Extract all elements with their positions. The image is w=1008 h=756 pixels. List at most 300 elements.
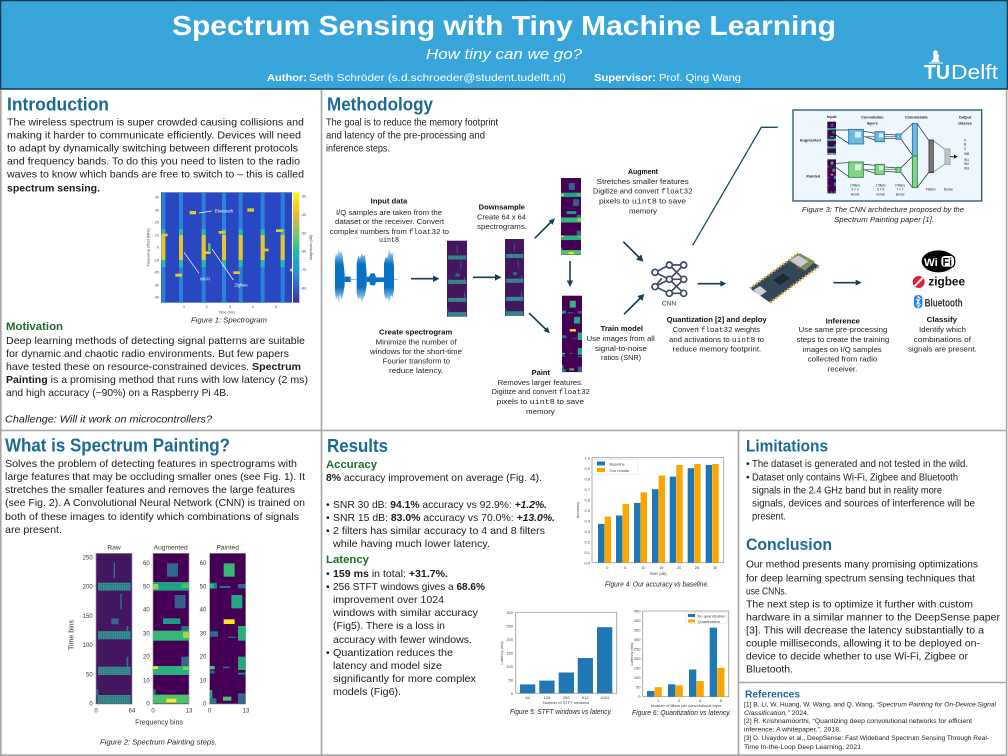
step: inference text: images on I/Q samples	[803, 345, 882, 354]
chart: figure 5 STFT windows vs latency: 50	[509, 678, 514, 682]
figure 2: spectrum painting steps: 60	[143, 561, 150, 567]
chart: figure 4 accuracy vs baseline: 0.0	[584, 560, 591, 566]
chart: figure 5 STFT windows vs latency: 0	[511, 691, 514, 696]
figure 3: CNN architecture	[793, 110, 982, 201]
chart: figure 6 quantization vs latency: 50	[636, 684, 641, 690]
panel: methodology	[326, 94, 982, 416]
accuracy text: while having much lower latency.	[332, 538, 490, 550]
latency text: latency and model size	[333, 660, 442, 672]
step: train model text: Use images from all	[587, 334, 655, 343]
conclusion text: use CNNs.	[746, 586, 787, 598]
heading: motivation: Motivation	[6, 321, 63, 333]
figure 3: CNN architecture: 2 filters	[876, 184, 886, 188]
caption: figure 3: Figure 3: The CNN architecture proposed by the	[802, 205, 964, 214]
caption: figure 6: Figure 6: Quantization vs latency.	[632, 708, 731, 717]
figure 3: CNN architecture: W1	[964, 158, 969, 162]
figure 3: CNN architecture: V	[964, 139, 967, 143]
figure 2: spectrum painting steps	[68, 544, 250, 726]
chart: figure 4 accuracy vs baseline	[575, 456, 724, 576]
author line: Author:	[267, 72, 307, 84]
figure 3: CNN architecture: 2 filters	[895, 184, 905, 188]
figure 3: CNN architecture: B	[964, 142, 967, 146]
heading: results: Results	[327, 436, 388, 456]
logo: TU Delft: TU	[924, 62, 950, 84]
limitations text: •	[746, 472, 750, 484]
figure 3: CNN architecture: Flatten	[926, 188, 936, 192]
arrow: downsample to paint	[529, 313, 550, 333]
chart: figure 5 STFT windows vs latency: 1024	[600, 695, 610, 700]
logo: TU Delft	[924, 50, 999, 84]
axis labels: -30	[301, 195, 306, 199]
reference list: [3] D. Uvaydov et al., DeepSense: Fast Wideband Spectrum Sensing Through Real-	[744, 735, 989, 742]
chart: figure 6 quantization vs latency: 100	[634, 675, 641, 680]
chart: figure 6 quantization vs latency: 4	[699, 698, 702, 703]
header banner	[0, 0, 1008, 89]
axis labels: 5	[275, 305, 277, 309]
figure 2: spectrum painting steps: 0	[151, 709, 155, 715]
chart: figure 6 quantization vs latency: 8	[720, 698, 723, 703]
heading: introduction: Introduction	[7, 94, 109, 114]
figure 2: spectrum painting steps: 0	[146, 702, 150, 708]
chart: figure 6 quantization vs latency: 2	[678, 698, 681, 703]
axis labels: 2	[206, 305, 208, 309]
accuracy text: •	[326, 525, 330, 537]
step: paint text: Removes larger features.	[498, 378, 583, 387]
intro text: and frequency bands. To do this you need to listen to the radio	[7, 156, 300, 168]
heading: limitations: Limitations	[746, 436, 828, 456]
arrow: augment to paint	[567, 261, 573, 287]
axis labels: 10	[155, 233, 159, 237]
image: augmented spectrogram	[561, 178, 581, 255]
chart: figure 4 accuracy vs baseline: 1.0	[584, 456, 591, 460]
chart: figure 5 STFT windows vs latency: 512	[582, 695, 589, 700]
step: train model text: ratios (SNR)	[601, 353, 641, 362]
caption: figure 4: Figure 4: Our accuracy vs baseline.	[605, 580, 709, 588]
legend: Our results	[610, 468, 629, 473]
chart: figure 4 accuracy vs baseline: 0.4	[584, 518, 591, 524]
step: quantization text: and activations to uint8 to	[669, 335, 764, 345]
step: input data text	[330, 196, 449, 245]
arrow: downsample to augment	[535, 218, 555, 238]
conclusion text	[746, 558, 1001, 676]
step: inference text	[797, 316, 889, 373]
figure 3: CNN architecture: Augmented	[800, 138, 822, 142]
reference list	[744, 702, 997, 751]
panel: results	[326, 436, 731, 717]
reference list: [2] R. Krishnamoorthi, “Quantizing deep convolutional networks for efficient	[744, 718, 972, 725]
step: train model text: signal-to-noise	[595, 344, 647, 353]
figure 3: CNN architecture: 3 × 3	[851, 188, 859, 192]
step: downsample text	[477, 202, 527, 231]
goal text: inference steps.	[326, 142, 390, 154]
title: Spectrum Sensing with Tiny Machine Learning	[172, 10, 836, 41]
accuracy text: •	[326, 512, 330, 524]
figure 2: spectrum painting steps: 10	[143, 678, 150, 684]
chart: figure 5 STFT windows vs latency: 300	[506, 610, 514, 615]
figure 2: spectrum painting steps: 0	[203, 702, 207, 708]
author line	[267, 72, 741, 84]
step: augment text: Digitize and convert float32	[593, 186, 693, 196]
step: classify text: combinations of	[914, 335, 971, 344]
latency text: accuracy with fewer windows.	[333, 634, 472, 646]
logo: zigbee: zigbee	[928, 275, 965, 289]
heading: accuracy: Accuracy	[326, 459, 378, 471]
chart: figure 5 STFT windows vs latency: Number of STFT windows	[543, 700, 589, 705]
step: downsample text: spectrograms.	[477, 222, 527, 231]
figure 3: CNN architecture: layers	[867, 122, 878, 126]
step: augment text: Augment	[628, 167, 659, 176]
panel: limitations	[746, 436, 975, 522]
figure 2: spectrum painting steps: Time bins	[68, 619, 75, 650]
latency text: •	[326, 568, 330, 580]
conclusion text: The next step is to optimize it further with custom	[746, 598, 973, 610]
logo: zigbee	[913, 275, 965, 289]
axis labels: -40	[301, 213, 306, 217]
latency text: 159 ms in total: +31.7%.	[333, 568, 448, 580]
figure 3: CNN architecture: 7 × 7	[896, 188, 904, 192]
chart: figure 5 STFT windows vs latency: 64	[525, 695, 531, 700]
step: train model text: Train model	[601, 324, 643, 333]
step: classify text	[908, 315, 977, 353]
axis labels: -70	[301, 268, 306, 272]
annotations: Wi-Fi	[200, 277, 210, 282]
chart: figure 6 quantization vs latency: 150	[634, 666, 641, 670]
logo: Wi-Fi: Fi	[943, 257, 952, 269]
heading: what is spectrum painting: What is Spectrum Painting?	[5, 436, 230, 456]
intro text: to adapt by dynamically switching between different protocols	[7, 142, 298, 154]
chart: figure 6 quantization vs latency: 400	[634, 618, 641, 623]
step: inference text: receiver.	[828, 364, 857, 373]
panel: introduction	[5, 94, 313, 426]
icon: waveform	[335, 247, 397, 304]
caption: figure 2: Figure 2: Spectrum Painting steps.	[100, 738, 217, 746]
description text: are present.	[5, 524, 62, 536]
motivation text: and high accuracy (~90%) on a Raspberry Pi 4B.	[6, 387, 229, 399]
axis labels: 40	[155, 196, 159, 200]
intro text: spectrum sensing.	[7, 182, 100, 194]
figure 3: CNN architecture: Concatenate	[905, 116, 928, 120]
axis labels: -10	[154, 258, 159, 262]
figure 2: spectrum painting steps: 10	[200, 678, 207, 684]
reference list: inference: A whitepaper.”, 2018.	[744, 726, 841, 734]
step: create spectrogram text: windows for the short-time	[369, 347, 462, 356]
axis labels: -50	[301, 231, 306, 235]
figure 2: spectrum painting steps: 200	[83, 585, 93, 591]
figure 3: CNN architecture: W2	[964, 162, 969, 166]
figure 2: spectrum painting steps: 30	[200, 631, 207, 637]
figure 3: CNN architecture: kernel	[876, 193, 885, 197]
chart: figure 4 accuracy vs baseline: 0.6	[584, 498, 591, 502]
step: paint text	[492, 368, 590, 416]
chart: figure 6 quantization vs latency: Number of filters per convolutional layer	[651, 703, 722, 708]
legend	[594, 460, 638, 474]
figure 2: spectrum painting steps: 64	[129, 709, 136, 715]
chart: figure 4 accuracy vs baseline: 0	[606, 565, 609, 570]
axis labels: 30	[155, 208, 159, 212]
figure 3: CNN architecture: kernel	[851, 193, 860, 197]
figure 2: spectrum painting steps: 13	[243, 709, 250, 715]
step: classify text: signals are present.	[908, 344, 977, 353]
latency text: •	[326, 581, 330, 593]
chart: figure 6 quantization vs latency: 250	[634, 646, 641, 652]
accuracy text	[326, 472, 555, 550]
logo: TU Delft: Delft	[951, 62, 999, 84]
figure 3: CNN architecture: Output	[959, 116, 972, 120]
axis labels: -20	[154, 271, 159, 275]
heading: methodology: Methodology	[327, 94, 433, 114]
latency text: (Fig5). There is a loss in	[333, 620, 445, 632]
arrow: waveform to spectrogram	[411, 276, 440, 282]
author line: Supervisor:	[594, 72, 656, 84]
conclusion text: Our method presents many promising optimizations	[746, 558, 978, 570]
figure 2: spectrum painting steps: 40	[143, 608, 150, 614]
figure 2: spectrum painting steps: 13	[186, 709, 193, 715]
axis labels: Frequency offset (MHz)	[147, 228, 151, 266]
step: classify text: Classify	[927, 315, 957, 324]
legend: Baseline	[610, 462, 626, 466]
limitations text: •	[746, 458, 750, 470]
figure 2: spectrum painting steps: 100	[83, 643, 93, 649]
axis labels: 3	[229, 305, 231, 309]
chart: figure 4 accuracy vs baseline: 25	[695, 565, 700, 570]
conclusion text: Bluetooth.	[746, 664, 793, 676]
chart: figure 4 accuracy vs baseline: 0.3	[584, 529, 591, 534]
goal text: and latency of the pre-processing and	[326, 130, 485, 142]
latency text: •	[326, 647, 330, 659]
caption: figure 1: Figure 1: Spectrogram	[191, 316, 267, 324]
accuracy text: 2 filters has similar accuracy to 4 and 8 filters	[333, 525, 545, 537]
figure 2: spectrum painting steps: 0	[94, 709, 98, 715]
figure 3: CNN architecture: Input	[827, 115, 837, 119]
axis labels: 4	[252, 305, 254, 309]
chart: figure 6 quantization vs latency: 0	[638, 694, 641, 699]
axis labels: Time (ms)	[219, 310, 235, 314]
step: inference text: steps to create the training	[797, 335, 889, 344]
latency text: improvement over 1024	[333, 594, 444, 606]
chart: figure 5 STFT windows vs latency	[499, 610, 617, 705]
chart: figure 4 accuracy vs baseline: SNR (dB)	[649, 571, 667, 576]
caption: figure 3	[802, 205, 964, 224]
latency text: Quantization reduces the	[333, 647, 453, 659]
axis labels: -80	[301, 286, 306, 290]
legend	[686, 612, 727, 624]
latency text: models (Fig6).	[333, 686, 401, 698]
step: paint text: Digitize and convert float32	[492, 387, 590, 397]
limitations text	[746, 458, 975, 522]
annotations	[184, 209, 248, 287]
description text: stretches the smaller features and removes the large features	[5, 484, 295, 496]
figure 2: spectrum painting steps: 60	[200, 561, 207, 567]
motivation text	[6, 335, 308, 399]
figure 3: CNN architecture: Z	[964, 147, 966, 151]
image: spectrogram	[447, 241, 467, 317]
step: create spectrogram text: Create spectrogram	[379, 328, 452, 336]
motivation text: Painting is a promising method that runs with low latency (2 ms)	[6, 374, 308, 386]
motivation text: have tested these on resource-constrained devices. Spectrum	[6, 361, 301, 373]
figure 2: spectrum painting steps: 250	[83, 556, 93, 562]
axis labels: 1	[183, 305, 185, 309]
accuracy text: SNR 30 dB: 94.1% accuracy vs 92.9%: +1.2%.	[333, 499, 547, 511]
conclusion text: device to decide whether to use Wi-Fi, Zigbee or	[746, 650, 968, 662]
accuracy text: •	[326, 499, 330, 511]
heading: latency: Latency	[326, 554, 370, 566]
logo: Bluetooth	[914, 295, 963, 309]
step: paint text: pixels to uint8 to save	[497, 397, 584, 407]
step: augment text: memory	[629, 206, 657, 215]
step: input data text: Input data	[371, 196, 408, 206]
step: input data text: I/Q samples are taken from the	[336, 208, 442, 217]
step: downsample text: Downsample	[479, 202, 525, 212]
limitations text: signals in the 2.4 GHz band but in reality more	[752, 484, 942, 496]
step: create spectrogram text: Minimize the number of	[376, 338, 457, 346]
chart: figure 5 STFT windows vs latency: 200	[506, 637, 514, 642]
logo: Bluetooth: Bluetooth	[925, 297, 963, 309]
lower right diagram	[623, 242, 965, 314]
chart: figure 5 STFT windows vs latency: 128	[544, 695, 551, 700]
figure 3: CNN architecture: WB	[964, 152, 970, 156]
step: inference text: Inference	[826, 316, 860, 325]
latency text: significantly for more complex	[333, 673, 477, 685]
heading: conclusion: Conclusion	[746, 535, 832, 554]
panel: what is spectrum painting	[5, 436, 305, 746]
chart: figure 6 quantization vs latency: 1	[657, 698, 660, 703]
logo: Wi-Fi	[922, 250, 955, 272]
conclusion text: couple milliseconds, allowing it to be deployed on-	[746, 638, 981, 650]
accuracy text: SNR 15 dB: 83.0% accuracy vs 70.0%: +13.0%.	[333, 512, 555, 524]
axis labels: 20	[155, 221, 159, 225]
step: train model text	[587, 324, 655, 362]
figure 2: spectrum painting steps: 40	[200, 608, 207, 614]
arrow: CNN to board	[698, 281, 726, 287]
step: create spectrogram text: Fourier transform to	[383, 356, 450, 366]
chart: figure 4 accuracy vs baseline: 10	[641, 565, 646, 570]
chart: figure 4 accuracy vs baseline: 15	[659, 565, 664, 570]
axis labels: Magnitude (dB)	[309, 235, 313, 260]
figure 2: spectrum painting steps: 50	[143, 584, 150, 590]
subtitle: How tiny can we go?	[426, 46, 583, 63]
chart: figure 6 quantization vs latency: 450	[634, 608, 641, 614]
description text: large features that may be occluding smaller ones (see Fig. 1). It	[5, 471, 305, 483]
intro text	[6, 116, 304, 194]
step: input data text: complex numbers from float32 to	[330, 227, 449, 237]
chart: figure 4 accuracy vs baseline: 0.7	[584, 487, 591, 492]
figure 2: spectrum painting steps: Painted	[216, 544, 239, 551]
latency text: windows with similar accuracy	[332, 607, 479, 619]
step: paint text: memory	[526, 407, 555, 416]
chart: figure 4 accuracy vs baseline: 0.2	[584, 540, 591, 544]
figure 2: spectrum painting steps: 20	[143, 655, 150, 661]
reference list: Classification,” 2024.	[744, 710, 809, 717]
latency text	[326, 568, 486, 698]
heading: references: References	[745, 690, 800, 700]
figure 2: spectrum painting steps: 50	[86, 672, 93, 678]
chart: figure 6 quantization vs latency: Latency (ms)	[629, 642, 634, 666]
panel: references	[744, 690, 997, 751]
step: downsample text: Create 64 x 64	[477, 212, 526, 222]
connector line: CNN to figure 3	[693, 127, 778, 245]
step: augment text	[593, 167, 693, 215]
figure 3: CNN architecture: Dense	[944, 188, 953, 192]
chart: figure 5 STFT windows vs latency: Latency (ms)	[499, 641, 504, 665]
author line: Seth Schröder (s.d.schroeder@student.tudelft.nl)	[309, 72, 566, 84]
step: quantization text: reduce memory footprint.	[673, 344, 761, 353]
chart: figure 6 quantization vs latency: 300	[634, 637, 641, 642]
description text: Solves the problem of detecting features in spectrograms with	[5, 458, 297, 470]
step: inference text: collected from radio	[808, 354, 877, 363]
motivation text: for dynamic and chaotic radio environments. But few papers	[6, 348, 289, 360]
chart: figure 5 STFT windows vs latency: 250	[506, 624, 514, 628]
chart: figure 4 accuracy vs baseline: 0.9	[584, 466, 591, 471]
chart: figure 4 accuracy vs baseline: 0.1	[584, 550, 591, 555]
annotations: Zigbee	[234, 282, 248, 287]
label: CNN: CNN	[662, 301, 676, 308]
step: create spectrogram text: reduce latency.	[389, 366, 443, 375]
figure 3: CNN architecture: W3	[964, 166, 969, 170]
step: inference text: Use same pre-processing	[799, 325, 887, 334]
axis labels: -60	[301, 250, 306, 254]
description text	[5, 458, 305, 536]
figure 2: spectrum painting steps: 150	[83, 614, 93, 620]
bars: our results	[605, 464, 719, 563]
challenge question: Challenge: Will it work on microcontrollers?	[5, 414, 212, 426]
step: augment text: Stretches smaller features	[597, 177, 689, 186]
reference list: Time In-the-Loop Deep Learning, 2021	[744, 744, 861, 751]
limitations text: Dataset only contains Wi-Fi, Zigbee and Bluetooth	[752, 472, 958, 484]
figure 2: spectrum painting steps: 0	[89, 701, 93, 707]
chart: figure 4 accuracy vs baseline: 30	[713, 565, 718, 570]
step: create spectrogram text	[369, 328, 462, 375]
figure 2: spectrum painting steps: 50	[200, 584, 207, 590]
arrow: spectrogram to downsample	[473, 274, 502, 281]
figure 3: CNN architecture: kernel	[896, 193, 905, 197]
axis labels	[147, 195, 313, 314]
step: input data text: uint8	[379, 237, 399, 245]
conclusion text: for deep learning spectrum sensing techniques that	[746, 572, 975, 584]
chart: figure 6 quantization vs latency: 350	[634, 628, 641, 632]
reference list: [1] B. Li, W. Huang, W. Wang, and Q. Wang, “Spectrum Painting for On-Device Signal	[744, 702, 997, 708]
chart: figure 4 accuracy vs baseline: Accuracy	[575, 502, 580, 518]
step: augment text: pixels to uint8 to save	[599, 196, 686, 206]
intro text: making it harder to communicate efficiently. Devices will need	[7, 130, 301, 142]
figure 3: CNN architecture: Painted	[806, 174, 821, 178]
chart: figure 6 quantization vs latency	[629, 608, 729, 708]
goal text	[326, 116, 498, 154]
legend: Quantization	[698, 619, 720, 624]
figure 3: CNN architecture: Convolution	[861, 116, 884, 120]
chart: figure 5 STFT windows vs latency: 150	[506, 650, 514, 656]
conclusion text: hardware in a similar manner to the DeepSense paper	[746, 612, 1001, 624]
accuracy text: 8% accuracy improvement on average (Fig. 4).	[326, 472, 542, 484]
goal text: The goal is to reduce the memory footprint	[326, 116, 498, 128]
caption: figure 3: Spectrum Painting paper [1].	[834, 215, 934, 224]
step: quantization text	[667, 315, 767, 353]
arrow: board to classify	[833, 280, 862, 286]
motivation text: Deep learning methods of detecting signal patterns are suitable	[6, 335, 305, 347]
step: quantization text: Quantization [2] and deploy	[667, 315, 767, 324]
intro text: waves to know which bands are free to switch to – this is called	[6, 168, 304, 180]
panel: conclusion	[746, 535, 1001, 676]
figure 3: CNN architecture: 2 filters	[850, 184, 860, 188]
bars: baseline	[598, 465, 712, 563]
image: painted spectrogram	[562, 296, 582, 372]
step: classify text: Identify which	[919, 325, 966, 334]
chart: figure 4 accuracy vs baseline: 0.5	[584, 508, 591, 513]
arrow: augment to CNN	[623, 242, 643, 262]
chart: figure 5 STFT windows vs latency: 100	[506, 664, 514, 669]
image: downsampled spectrogram	[505, 239, 524, 316]
figure 2: spectrum painting steps: 20	[200, 655, 207, 661]
conclusion text: [3]. This will decrease the latency substantially to a	[746, 624, 984, 636]
